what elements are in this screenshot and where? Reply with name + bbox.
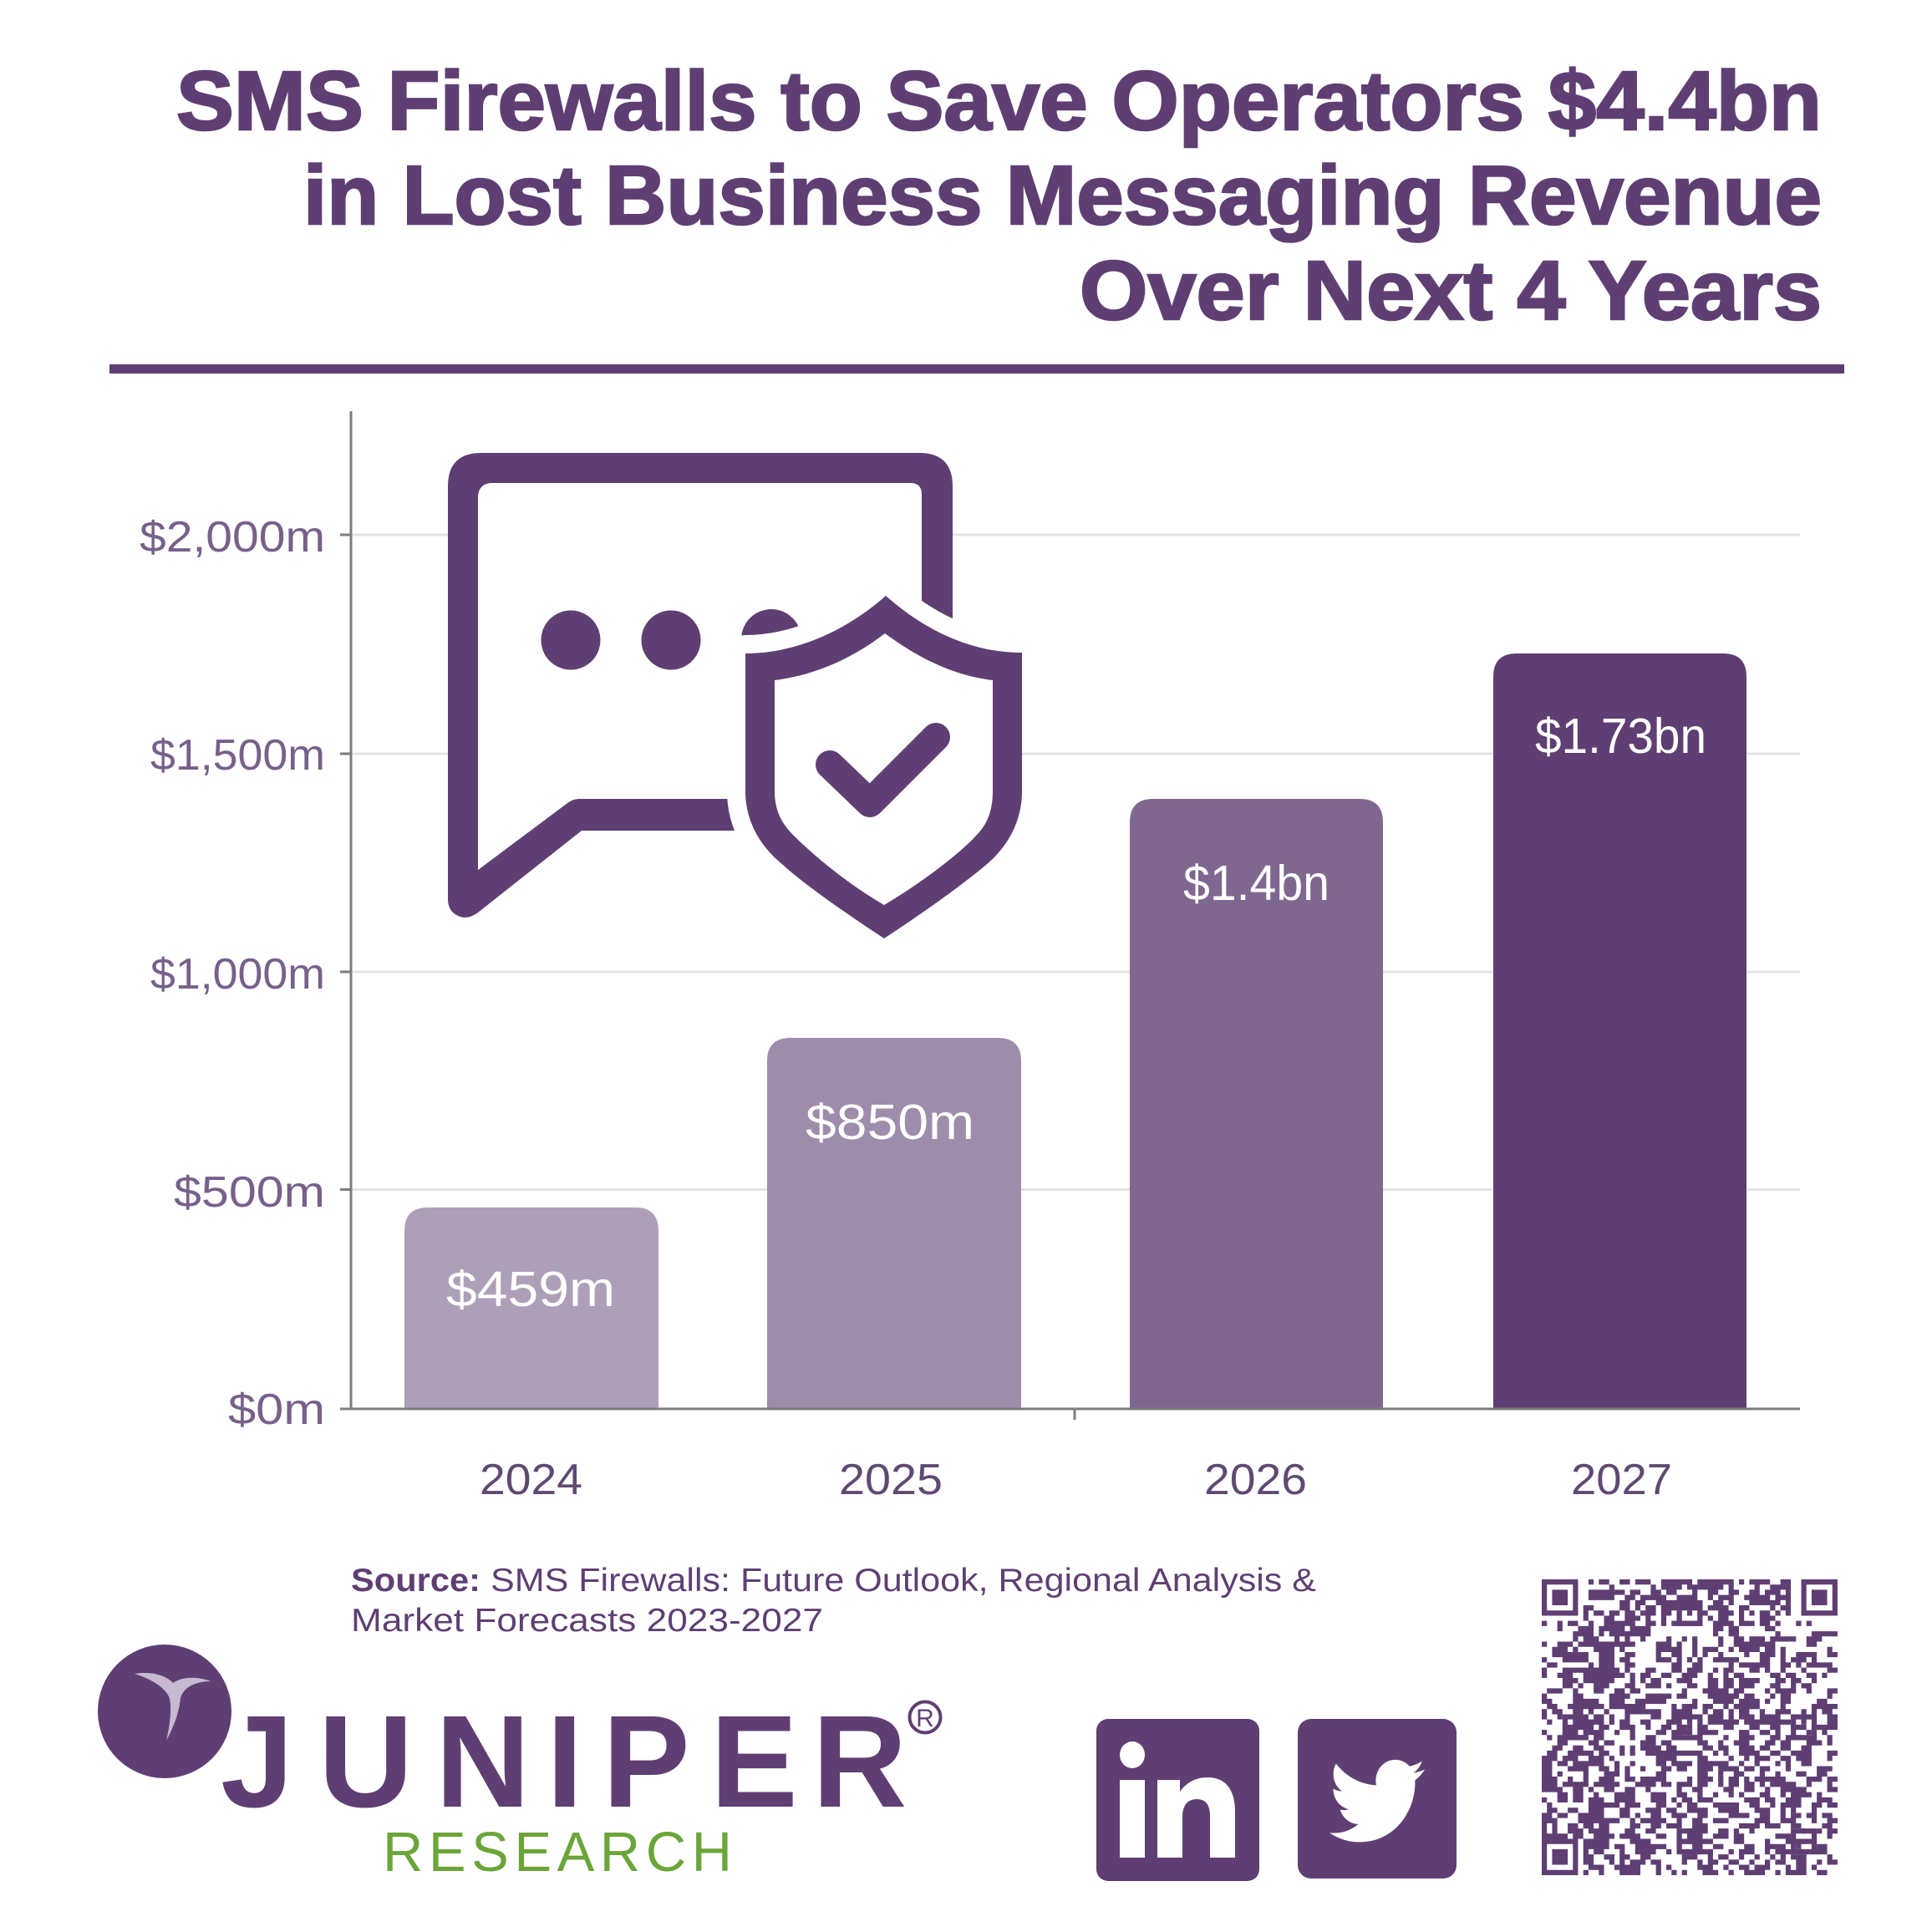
logo subtitle: RESEARCH [383, 1821, 732, 1884]
logo wordmark: JUNIPER [221, 1689, 907, 1835]
title: in Lost Business Messaging Revenue [303, 149, 1822, 242]
title rule [109, 364, 1844, 374]
logo mark [98, 1645, 231, 1778]
bar value labels: $459m [446, 1262, 615, 1317]
bar value labels: $1.73bn [1535, 709, 1706, 764]
title: SMS Firewalls to Save Operators $4.4bn [176, 54, 1822, 148]
QR alignment patterns [1563, 1600, 1817, 1854]
source text: Source: [351, 1563, 480, 1599]
bar value labels [446, 709, 1706, 1317]
icon: bubble fill [478, 483, 922, 870]
icon: typing dots [541, 609, 801, 670]
source text: Market Forecasts 2023-2027 [351, 1603, 823, 1639]
icon: chat bubble with shield [448, 453, 1022, 938]
source text: SMS Firewalls: Future Outlook, Regional Analysis & [491, 1563, 1316, 1599]
icon: shield [745, 596, 1022, 938]
bar value labels: $1.4bn [1183, 856, 1330, 911]
QR code [1542, 1579, 1838, 1875]
bar value labels: $850m [806, 1095, 974, 1150]
y axis labels [140, 513, 325, 1434]
bar: 2025 [767, 1038, 1021, 1409]
y axis labels: $2,000m [140, 513, 325, 562]
bar: 2027 [1493, 653, 1746, 1409]
x axis labels [480, 1456, 1672, 1504]
y axis labels: $0m [228, 1385, 325, 1434]
registered mark: R [916, 1705, 934, 1732]
title: Over Next 4 Years [1080, 244, 1822, 338]
icon: chat bubble [448, 453, 953, 918]
title [176, 54, 1822, 338]
icon: check mark [830, 737, 936, 803]
bar chart [140, 411, 1800, 1504]
bar: 2024 [404, 1208, 658, 1409]
bar: 2026 [1130, 799, 1383, 1409]
icon: LinkedIn [1096, 1719, 1259, 1881]
x axis labels: 2025 [839, 1456, 943, 1504]
x axis labels: 2027 [1571, 1456, 1672, 1504]
QR finder patterns [1542, 1579, 1838, 1875]
y axis labels: $1,500m [150, 731, 325, 780]
y axis labels: $500m [174, 1168, 325, 1217]
logo: Juniper Research [98, 1645, 941, 1884]
source text [351, 1563, 1316, 1639]
y axis labels: $1,000m [150, 950, 325, 999]
axes [340, 411, 1800, 1420]
x axis labels: 2026 [1204, 1456, 1307, 1504]
registered mark [909, 1701, 941, 1733]
icon: Twitter [1298, 1719, 1457, 1879]
x axis labels: 2024 [480, 1456, 582, 1504]
